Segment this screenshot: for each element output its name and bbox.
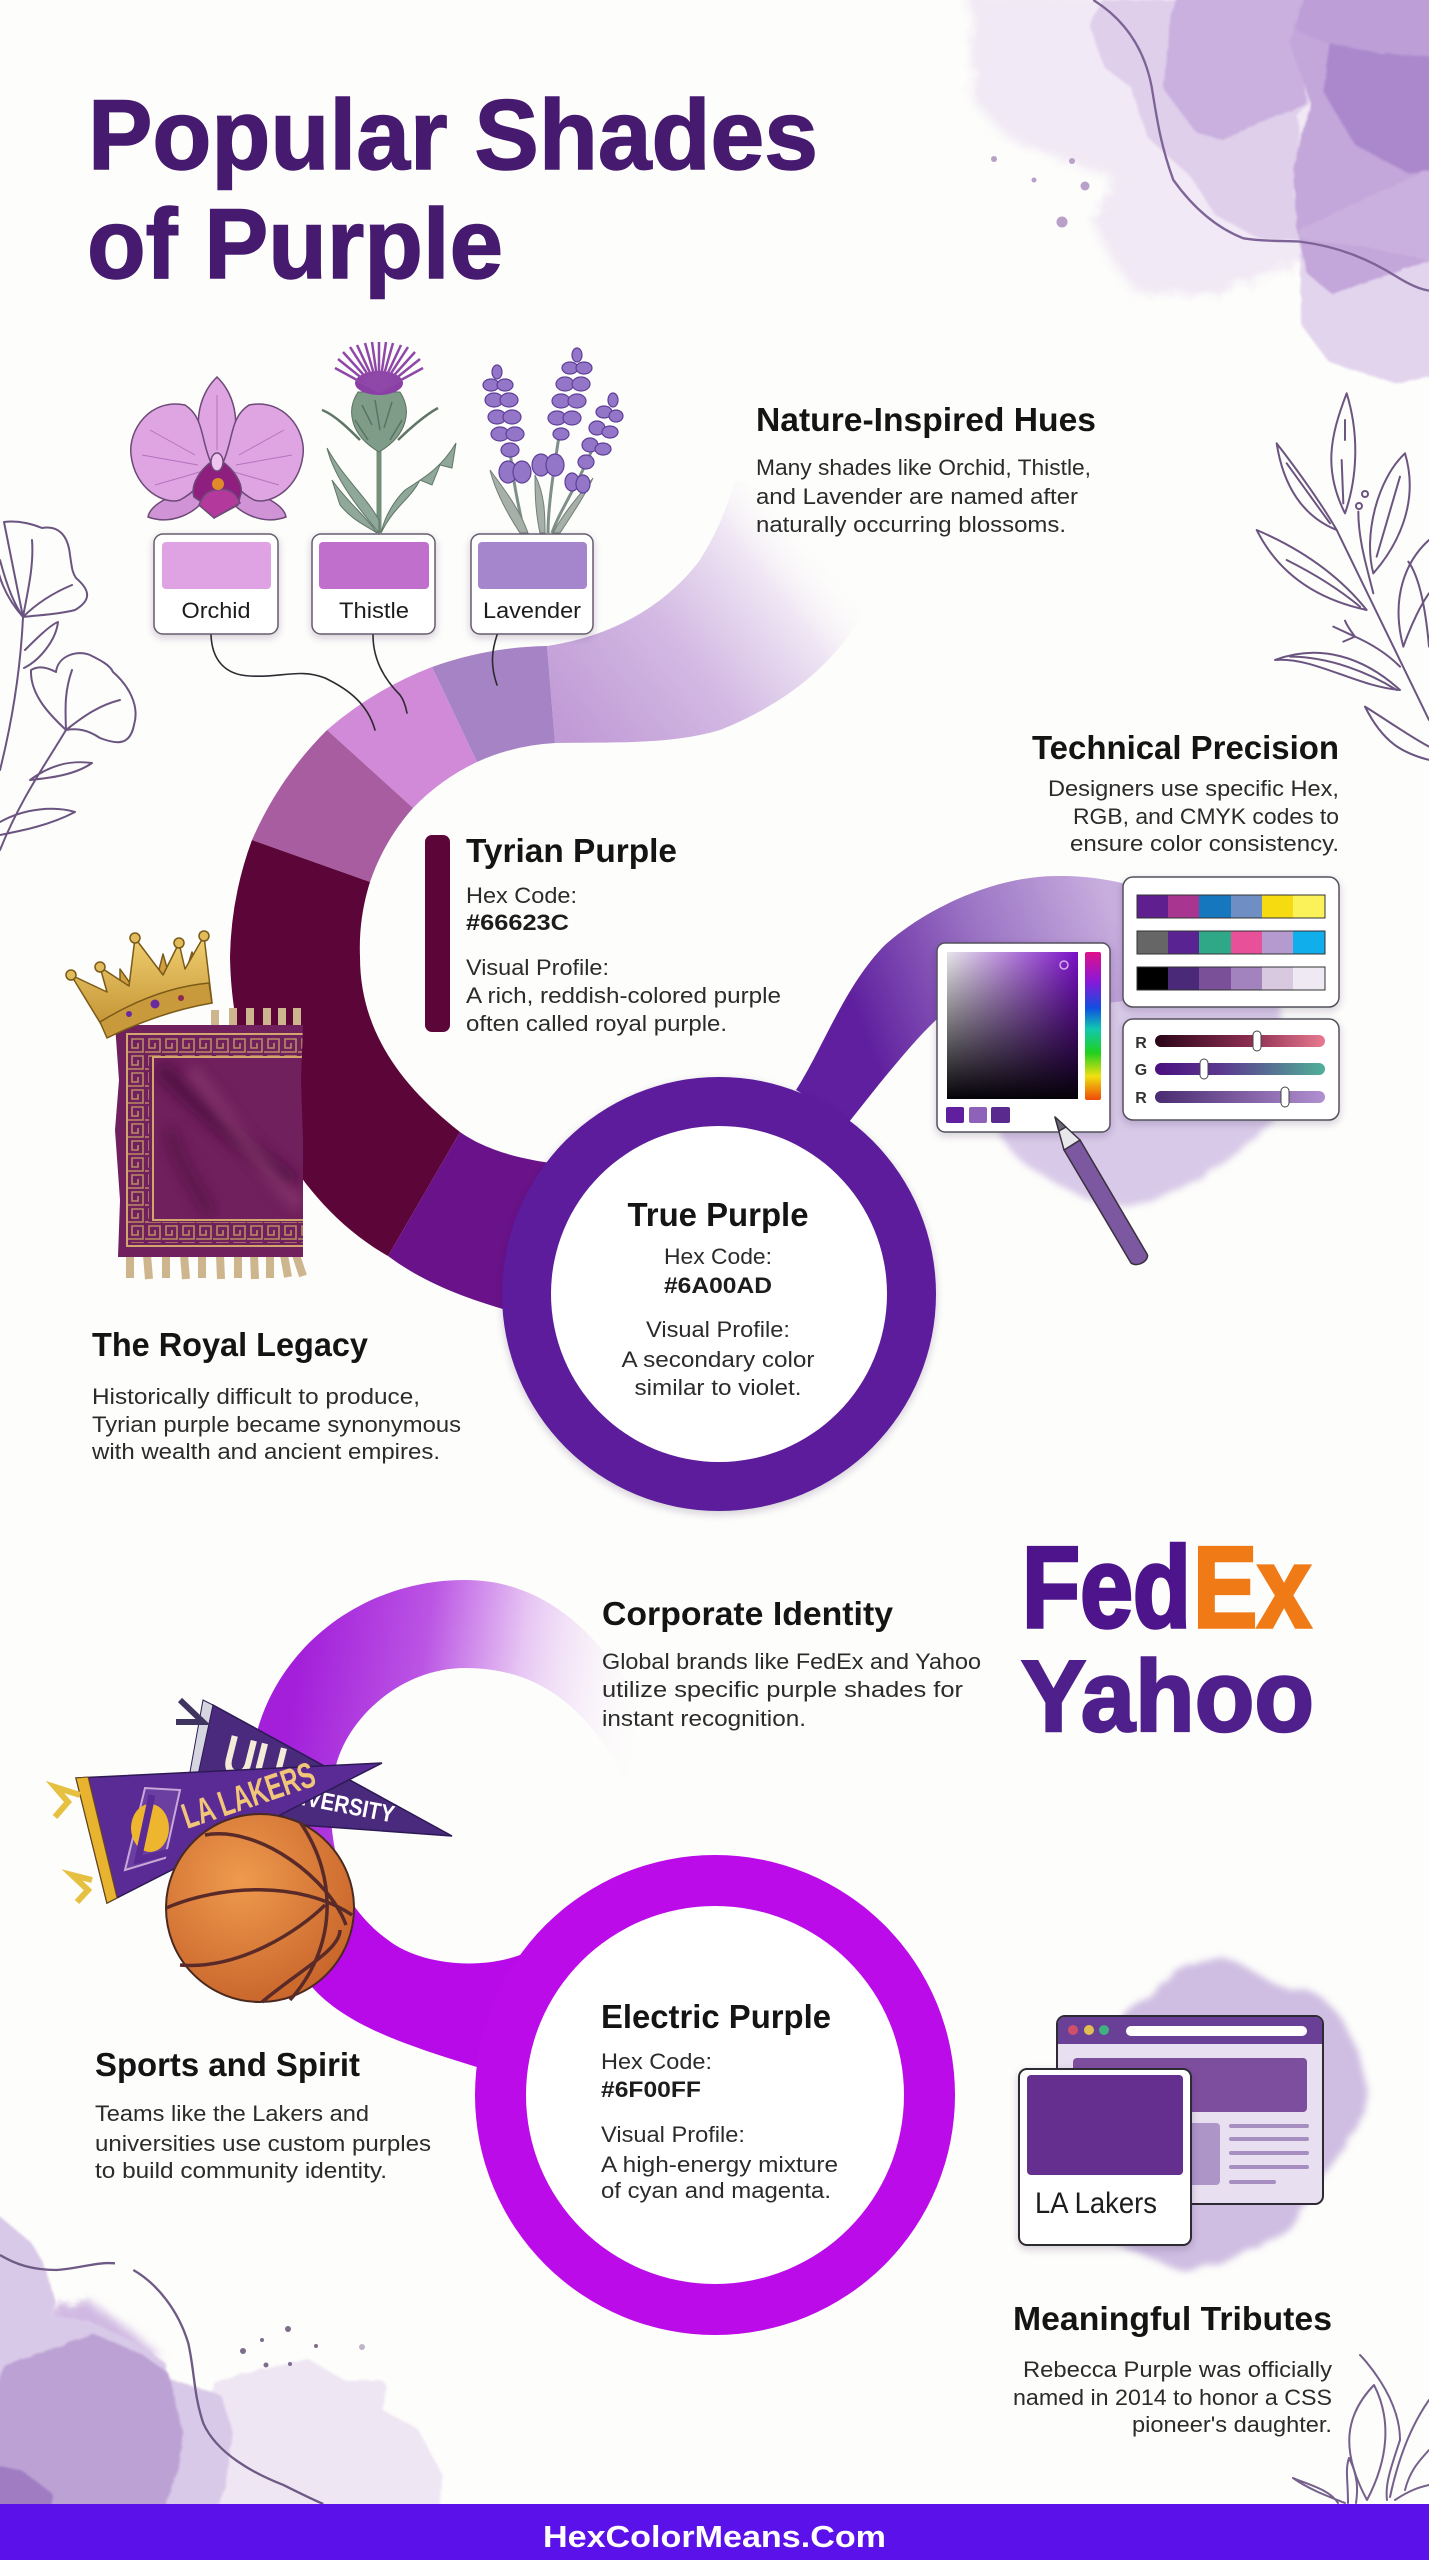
tyrian details: often called royal purple. [466,1011,727,1036]
lakers pennant [55,1753,382,1903]
lavender wash behind website illustration [1110,1956,1367,2272]
text: meaningful tributes [1013,2300,1333,2437]
tyrian details: A rich, reddish-colored purple [466,983,781,1008]
card: lavender swatch: Lavender [483,598,582,623]
text: technical precision: Designers use specific Hex, [1048,776,1339,801]
panel: tyrian purple profile [425,832,781,1036]
Yahoo wordmark: Yahoo [1021,1641,1314,1753]
FedEx wordmark: Fed [1022,1524,1191,1652]
icon: thistle flower [322,342,456,533]
icon: LA Lakers swatch card: LA Lakers [1035,2187,1157,2220]
watercolor wash: top right [963,0,1429,377]
text: meaningful tributes: Rebecca Purple was officially [1023,2357,1333,2382]
icon: RGB sliders card [1123,1019,1339,1120]
text: meaningful tributes: named in 2014 to honor a CSS [1013,2385,1332,2410]
ribbon: tyrian purple segment [230,840,460,1256]
icon: colour picker card [937,943,1110,1132]
icon: lavender sprigs [483,348,623,533]
title [87,79,818,299]
text: meaningful tributes: Meaningful Tributes [1013,2300,1332,2337]
text: technical precision: RGB, and CMYK codes to [1073,804,1339,829]
true purple details: #6A00AD [664,1273,772,1298]
footer bar: HexColorMeans.Com [543,2519,886,2554]
FedEx wordmark: Ex [1193,1524,1311,1652]
true purple details: Visual Profile: [646,1317,790,1342]
text: nature-inspired hues: naturally occurring blossoms. [756,512,1066,537]
icon: stylus pen [1055,1117,1147,1265]
card: thistle swatch [312,534,435,634]
university pennant: UU [217,1723,292,1799]
card: orchid swatch [154,534,278,634]
connector lines from swatches to ribbon [211,635,497,730]
icon: pennants and basketball [55,1700,452,2002]
text: sports and spirit: Sports and Spirit [95,2046,360,2083]
footer bar [0,2504,1429,2560]
electric purple details: Hex Code: [601,2049,712,2074]
icon: RGB sliders card: R [1135,1090,1147,1107]
electric purple details: Visual Profile: [601,2122,745,2147]
text: corporate identity: utilize specific purple shades for [602,1677,964,1702]
true purple details: A secondary color [622,1347,815,1372]
panel: electric purple profile [601,1998,838,2203]
icon: RGB sliders card: R [1135,1035,1147,1052]
university pennant: UNIVERSITY [270,1778,397,1829]
text: the royal legacy: Tyrian purple became synonymous [92,1412,461,1437]
university pennant [176,1700,452,1836]
title: Popular Shades [88,79,818,190]
connector arm to technical precision [796,876,1135,1122]
card: lavender swatch [471,534,593,634]
card: orchid swatch: Orchid [182,598,250,623]
electric purple heading: Electric Purple [601,1998,831,2035]
true purple ring [502,1077,936,1511]
text: the royal legacy [91,1326,461,1464]
tyrian details: #66623C [466,910,569,935]
ribbon: fading tail [547,480,885,743]
card: thistle swatch: Thistle [339,598,409,623]
text: sports and spirit [95,2046,431,2183]
electric purple details [601,2049,838,2203]
ribbon: orchid and thistle segment [327,667,477,808]
text: meaningful tributes: pioneer's daughter. [1132,2412,1332,2437]
electric ribbon: lower arm [262,1860,620,2080]
decorative floral line art: right [1257,393,1429,760]
lavender wash behind design tools [999,960,1280,1206]
rug [112,1022,307,1262]
text: technical precision [1032,729,1339,856]
icon: website window [1057,2016,1323,2204]
text: nature-inspired hues [756,401,1096,537]
true purple details [622,1244,815,1400]
decorative floral line art: bottom right [1293,2355,1429,2503]
text: sports and spirit: Teams like the Lakers and [95,2101,369,2126]
text: technical precision: ensure color consistency. [1070,831,1339,856]
electric purple details: A high-energy mixture [601,2152,838,2177]
brand logos: FedEx and Yahoo [1021,1524,1314,1753]
icon: LA Lakers swatch card [1019,2069,1191,2245]
text: the royal legacy: with wealth and ancient empires. [91,1439,440,1464]
ribbon: lavender segment [432,646,555,762]
panel: true purple profile [622,1196,815,1400]
text: nature-inspired hues: and Lavender are named after [756,484,1079,509]
text: nature-inspired hues: Many shades like Orchid, Thistle, [756,455,1091,480]
electric ribbon: fading upper arc [249,1580,660,1900]
ribbon: transition into true purple [388,1132,620,1340]
tyrian details: Hex Code: [466,883,577,908]
text: the royal legacy: The Royal Legacy [92,1326,369,1363]
lakers pennant: LA LAKERS [176,1753,320,1837]
true purple heading: True Purple [628,1196,808,1233]
rug fringe [130,1008,303,1279]
decorative floral line art: left [0,522,136,850]
icon: orchid flower [131,377,303,520]
text: corporate identity: Corporate Identity [602,1595,894,1632]
shade ribbon: tyrian section to true purple [230,480,885,1340]
crown [66,931,212,1038]
icon: RGB sliders card: G [1135,1062,1147,1079]
true purple details: similar to violet. [634,1375,802,1400]
text: sports and spirit: universities use custom purples [95,2131,431,2156]
electric purple details: #6F00FF [601,2077,701,2102]
ribbon: mauve segment [252,730,413,882]
tyrian details [466,883,781,1036]
text: corporate identity [602,1595,981,1731]
icon: palette card [1123,877,1339,1007]
text: technical precision: Technical Precision [1032,729,1339,766]
text: corporate identity: Global brands like FedEx and Yahoo [602,1649,981,1674]
electric purple ring [475,1855,955,2335]
tyrian colour bar [425,835,450,1032]
true purple details: Hex Code: [664,1244,772,1269]
tyrian heading: Tyrian Purple [466,832,677,869]
text: corporate identity: instant recognition. [602,1706,806,1731]
tyrian details: Visual Profile: [466,955,609,980]
electric purple details: of cyan and magenta. [601,2178,831,2203]
basketball [166,1814,354,2002]
icon: crown and tyrian rug [66,931,307,1279]
watercolor wash: bottom left [0,2222,437,2510]
text: sports and spirit: to build community identity. [95,2158,387,2183]
text: the royal legacy: Historically difficult to produce, [92,1384,420,1409]
title: of Purple [87,188,503,299]
text: nature-inspired hues: Nature-Inspired Hues [756,401,1096,438]
